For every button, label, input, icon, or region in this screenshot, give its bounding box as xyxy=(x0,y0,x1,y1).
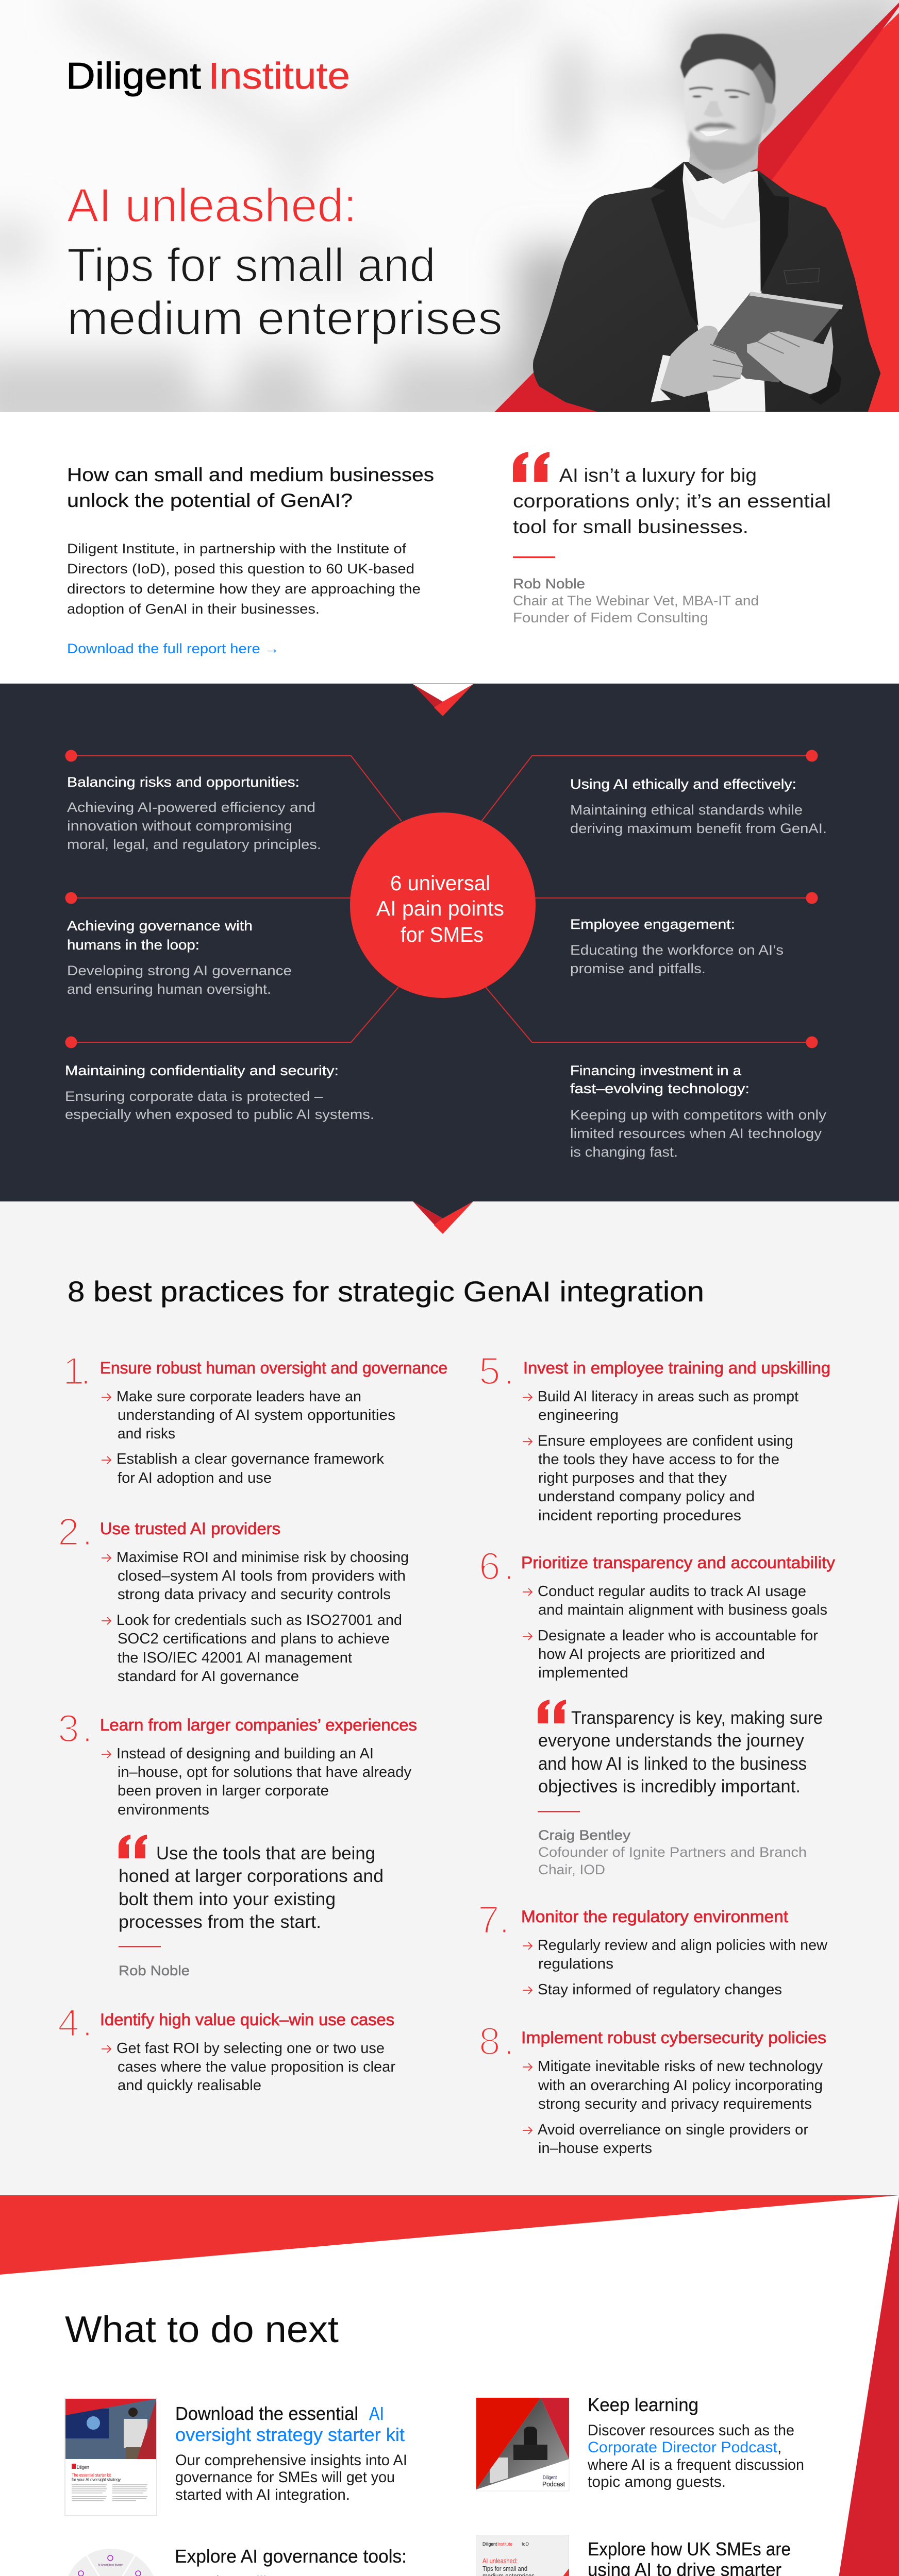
intro question heading: unlock the potential of GenAI? xyxy=(67,490,353,511)
red corner triangles xyxy=(494,3,899,412)
practice 2: 2. xyxy=(58,1510,93,1553)
intro paragraph: Directors (IoD), posed this question to 60 UK-based xyxy=(67,561,414,577)
next step: starter kit: started with AI integration. xyxy=(175,2486,350,2503)
pull quote: Craig Bentley: Cofounder of Ignite Partners and Branch xyxy=(538,1844,807,1860)
pull quote: Craig Bentley: Craig Bentley xyxy=(538,1827,631,1843)
practice 8: Avoid overreliance on single providers or xyxy=(538,2122,808,2138)
practice 3: environments xyxy=(118,1802,209,1818)
pull quote: Craig Bentley: and how AI is linked to the business xyxy=(538,1754,807,1774)
heading: 8 best practices for strategic GenAI integration xyxy=(68,1275,704,1308)
practice 7: Stay informed of regulatory changes xyxy=(538,1981,782,1998)
connector dots xyxy=(65,750,818,1048)
pain point: engagement: promise and pitfalls. xyxy=(570,961,706,976)
pull quote: Craig Bentley xyxy=(538,1708,823,1877)
next step: starter kit: AI xyxy=(369,2403,384,2424)
practice 2 xyxy=(58,1510,409,1685)
practice 8: strong security and privacy requirements xyxy=(538,2096,812,2112)
next step: keep learning: Keep learning xyxy=(588,2394,698,2415)
next step: keep learning: , xyxy=(777,2439,781,2456)
title: Tips for small and xyxy=(67,239,436,292)
practice 6: how AI projects are prioritized and xyxy=(538,1646,765,1663)
central circle: for SMEs xyxy=(401,923,484,946)
thumbnail: starter kit document: for your AI oversight strategy xyxy=(72,2477,121,2483)
practice 2: Use trusted AI providers xyxy=(100,1519,280,1538)
thumbnail: report cover: AI unleashed: xyxy=(482,2557,518,2565)
connector lines xyxy=(71,756,812,1042)
thumbnail: podcast cover: Diligent xyxy=(543,2475,557,2481)
thumbnail: report cover: Tips for small and xyxy=(482,2565,527,2572)
practice 3: 3. xyxy=(58,1707,93,1750)
red diagonal shapes xyxy=(0,2195,899,2576)
practice 1: and risks xyxy=(118,1426,175,1442)
practice 3: in–house, opt for solutions that have already xyxy=(118,1764,411,1781)
next step: keep learning: topic among guests. xyxy=(588,2473,726,2490)
next step: keep learning: where AI is a frequent discussion xyxy=(587,2456,804,2473)
practice 8: Implement robust cybersecurity policies xyxy=(521,2028,826,2047)
pull quote: Rob Noble: bolt them into your existing xyxy=(119,1889,336,1909)
practice 5: Invest in employee training and upskilling xyxy=(523,1359,830,1377)
practice 3: Instead of designing and building an AI xyxy=(116,1745,374,1762)
link: download report: Download the full report here → xyxy=(67,641,279,656)
next step: starter kit: Download the essential xyxy=(175,2403,358,2424)
practice 2: Maximise ROI and minimise risk by choosing xyxy=(116,1549,409,1566)
pain point: financing: limited resources when AI technology xyxy=(570,1126,822,1141)
practice 4 xyxy=(58,2001,395,2094)
practice 8: in–house experts xyxy=(538,2140,652,2157)
pull quote: Craig Bentley: Chair, IOD xyxy=(538,1862,605,1877)
pain point: balancing risks: innovation without compromising xyxy=(67,818,292,834)
icon: quotation mark xyxy=(538,1700,566,1723)
quote attribution: Rob Noble xyxy=(513,576,585,591)
pain point: confidentiality xyxy=(65,1063,374,1122)
practice 5 xyxy=(479,1349,830,1524)
title xyxy=(67,179,503,345)
central circle xyxy=(350,812,536,998)
practice 1 xyxy=(63,1349,447,1486)
practice 5: right purposes and that they xyxy=(538,1470,727,1486)
pain point: balancing risks: Balancing risks and opportunities: xyxy=(67,774,299,790)
pain point: balancing risks: Achieving AI-powered efficiency and xyxy=(67,800,315,815)
pain point: ethics: deriving maximum benefit from GenAI. xyxy=(570,821,827,836)
heading: What to do next xyxy=(65,2309,339,2350)
practice 2: the ISO/IEC 42001 AI management xyxy=(118,1650,352,1666)
pull quote: Rob Noble: processes from the start. xyxy=(119,1912,321,1932)
panel: what to do next xyxy=(0,2195,899,2576)
icon: quotation mark xyxy=(513,452,550,482)
pull quote: tool for small businesses. xyxy=(513,516,748,537)
practice 1: Make sure corporate leaders have an xyxy=(116,1388,361,1405)
title: AI unleashed: xyxy=(67,179,357,232)
panel: introduction xyxy=(67,452,831,656)
pain point: engagement: Educating the workforce on AI’s xyxy=(570,942,784,958)
practice 6: Prioritize transparency and accountability xyxy=(521,1553,835,1572)
pull quote: Rob Noble: honed at larger corporations and xyxy=(119,1866,384,1886)
intro paragraph: adoption of GenAI in their businesses. xyxy=(67,601,320,617)
intro question heading xyxy=(67,464,434,511)
pull quote: Rob Noble xyxy=(119,1843,384,1978)
practice 3: Learn from larger companies’ experiences xyxy=(100,1716,417,1734)
chevron arrow top xyxy=(413,684,473,716)
photo: businessman with tablet xyxy=(533,34,880,412)
pain point: confidentiality: Maintaining confidentiality and security: xyxy=(65,1063,339,1078)
pull quote: Craig Bentley: Transparency is key, making sure xyxy=(571,1708,823,1728)
practice 1: Ensure robust human oversight and governance xyxy=(100,1359,447,1377)
panel: 6 universal AI pain points xyxy=(0,683,899,1201)
logo: Diligent Institute xyxy=(69,61,348,97)
practice 5: the tools they have access to for the xyxy=(538,1451,779,1468)
pain point: governance: and ensuring human oversight. xyxy=(67,981,271,997)
pull quote: corporations only; it’s an essential xyxy=(513,490,831,512)
next step: keep learning: Discover resources such as the xyxy=(588,2422,794,2439)
pain point: financing: fast–evolving technology: xyxy=(570,1081,750,1096)
next step: keep learning xyxy=(587,2394,804,2490)
practice 6: implemented xyxy=(538,1665,628,1681)
thumbnail: starter kit document: Diligent xyxy=(77,2465,89,2470)
practice 5: Build AI literacy in areas such as prompt xyxy=(538,1388,798,1405)
practice 2: standard for AI governance xyxy=(118,1668,299,1685)
intro paragraph xyxy=(67,541,421,617)
icon: quotation mark xyxy=(119,1835,147,1858)
practice 7 xyxy=(478,1898,828,1998)
pain point: ethics: Maintaining ethical standards while xyxy=(570,802,803,818)
central circle: 6 universal xyxy=(390,871,490,895)
pain point: governance: humans in the loop: xyxy=(67,937,199,953)
quote attribution: Founder of Fidem Consulting xyxy=(513,610,708,625)
next step: governance tools xyxy=(175,2546,407,2576)
thumbnail: starter kit document: The essential starter kit xyxy=(72,2472,111,2478)
next step: governance tools: Explore AI governance tools: xyxy=(175,2546,407,2567)
practice 8: Mitigate inevitable risks of new technology xyxy=(538,2058,823,2075)
pull quote: Craig Bentley: objectives is incredibly important. xyxy=(538,1776,801,1797)
pull quote: AI isn’t a luxury for big xyxy=(559,465,757,486)
logo: Diligent Institute: Institute xyxy=(208,56,350,97)
next step: starter kit: Our comprehensive insights into AI xyxy=(175,2452,407,2469)
practice 5: engineering xyxy=(538,1407,619,1423)
practice 4: and quickly realisable xyxy=(118,2077,261,2094)
pain point: financing xyxy=(570,1063,827,1160)
diagram: GovernAI wheel: AI Smart Book Builder xyxy=(98,2564,123,2567)
practice 2: closed–system AI tools from providers with xyxy=(118,1568,406,1584)
central circle: AI pain points xyxy=(376,896,504,920)
next step: keep learning: Corporate Director Podcast xyxy=(588,2439,778,2456)
pain point: confidentiality: especially when exposed to public AI systems. xyxy=(65,1107,374,1122)
practice 4: Get fast ROI by selecting one or two use xyxy=(116,2040,385,2057)
pain point: confidentiality: Ensuring corporate data is protected – xyxy=(65,1089,323,1104)
thumbnail: report cover: Diligent xyxy=(482,2541,497,2547)
intro paragraph: Diligent Institute, in partnership with the Institute of xyxy=(67,541,407,556)
diagram: GovernAI wheel xyxy=(64,2549,158,2576)
practice 8 xyxy=(479,2020,826,2157)
pain point: engagement xyxy=(570,917,784,976)
practice 7: regulations xyxy=(538,1956,613,1972)
pain point: engagement: Employee engagement: xyxy=(570,917,735,932)
next step: starter kit: governance for SMEs will get you xyxy=(175,2469,395,2486)
practice 7: Regularly review and align policies with new xyxy=(538,1937,828,1954)
pain point: financing: Financing investment in a xyxy=(570,1063,742,1078)
practice 2: SOC2 certifications and plans to achieve xyxy=(118,1631,390,1647)
intro question heading: How can small and medium businesses xyxy=(67,464,434,485)
thumbnail: report cover: IoD xyxy=(522,2541,529,2547)
next step: UK SMEs report: Explore how UK SMEs are xyxy=(588,2538,791,2560)
pain point: ethics xyxy=(570,776,827,836)
practice 1: 1. xyxy=(63,1349,91,1393)
pain point: governance: Developing strong AI governance xyxy=(67,963,292,978)
practice 5: Ensure employees are confident using xyxy=(538,1433,793,1449)
pull quote: Craig Bentley: everyone understands the journey xyxy=(538,1731,804,1751)
practice 5: incident reporting procedures xyxy=(538,1507,741,1524)
pain point: governance: Achieving governance with xyxy=(67,918,253,934)
thumbnail: podcast cover xyxy=(476,2398,569,2491)
pain point: financing: Keeping up with competitors with only xyxy=(570,1107,827,1123)
pain point: balancing risks: moral, legal, and regulatory principles. xyxy=(67,837,321,852)
practice 2: strong data privacy and security controls xyxy=(118,1586,391,1603)
practice 5: 5. xyxy=(479,1349,514,1393)
practice 7: Monitor the regulatory environment xyxy=(521,1907,788,1926)
intro paragraph: directors to determine how they are approaching the xyxy=(67,581,421,597)
panel: hero banner xyxy=(0,0,899,438)
practice 6: Conduct regular audits to track AI usage xyxy=(538,1583,806,1600)
chevron arrow bottom xyxy=(413,1201,473,1234)
practice 2: Look for credentials such as ISO27001 and xyxy=(116,1612,402,1629)
practice 1: for AI adoption and use xyxy=(118,1470,272,1486)
practice 4: 4. xyxy=(58,2001,93,2044)
panel: 8 best practices xyxy=(0,1201,899,2195)
pain point: financing: is changing fast. xyxy=(570,1144,678,1160)
hero blurred background xyxy=(0,0,899,438)
thumbnail: report cover: Institute xyxy=(497,2541,512,2547)
practice 7: 7. xyxy=(478,1898,510,1941)
pain point: balancing risks xyxy=(67,774,321,852)
next step: starter kit: oversight strategy starter kit xyxy=(175,2424,405,2445)
practice 6: and maintain alignment with business goals xyxy=(538,1602,827,1618)
pull quote: Rob Noble: Rob Noble xyxy=(119,1963,190,1978)
practice 4: cases where the value proposition is clear xyxy=(118,2059,395,2075)
quote attribution xyxy=(513,576,759,625)
practice 1: Establish a clear governance framework xyxy=(116,1451,384,1467)
practice 6: Designate a leader who is accountable for xyxy=(538,1628,818,1644)
practice 6 xyxy=(479,1545,835,1877)
thumbnail: podcast cover: Podcast xyxy=(542,2481,565,2488)
pull quote: Rob Noble: Use the tools that are being xyxy=(156,1843,375,1863)
pull quote xyxy=(513,465,831,537)
next step: UK SMEs report xyxy=(588,2538,820,2576)
practice 5: understand company policy and xyxy=(538,1488,755,1505)
practice 8: 8. xyxy=(479,2020,514,2063)
practice 8: with an overarching AI policy incorporating xyxy=(538,2077,823,2094)
next step: starter kit xyxy=(175,2403,407,2503)
thumbnail: starter kit document xyxy=(65,2398,157,2516)
title: medium enterprises xyxy=(67,292,503,345)
pain point: ethics: Using AI ethically and effectively: xyxy=(570,776,796,792)
practice 3 xyxy=(58,1707,417,1978)
logo: Diligent Institute: Diligent xyxy=(66,56,201,97)
pain point: governance xyxy=(67,918,292,997)
practice 3: been proven in larger corporate xyxy=(118,1783,329,1799)
practice 4: Identify high value quick–win use cases xyxy=(100,2010,394,2029)
practice 1: understanding of AI system opportunities xyxy=(118,1407,395,1423)
quote attribution: Chair at The Webinar Vet, MBA-IT and xyxy=(513,593,759,608)
thumbnail: report cover xyxy=(476,2535,578,2576)
practice 6: 6. xyxy=(479,1545,514,1588)
